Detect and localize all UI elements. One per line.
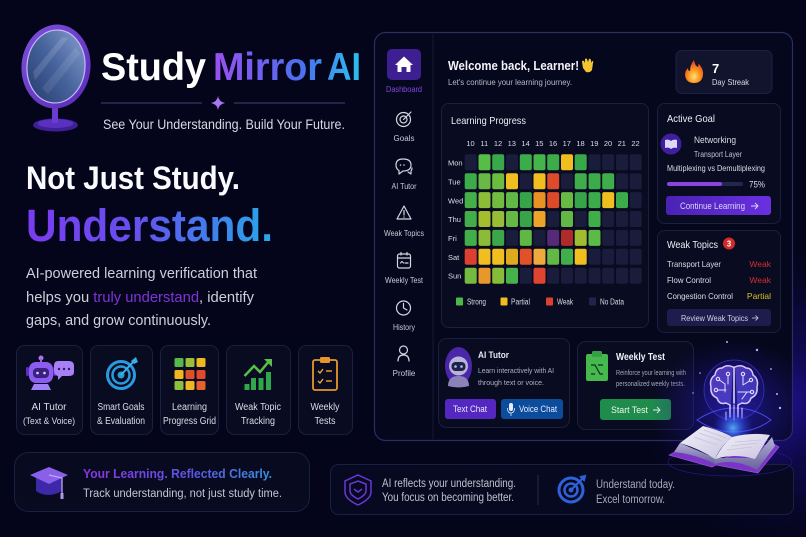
column labels: 12 <box>494 139 502 148</box>
feature: AI tutor <box>16 346 82 434</box>
banner: your learning: Your Learning. Reflected Clearly. <box>83 466 272 481</box>
button: text chat: Text Chat <box>453 404 487 414</box>
card: AI tutor <box>438 338 570 428</box>
column labels: 11 <box>480 139 488 148</box>
icon: open book <box>669 426 779 473</box>
feature: AI tutor: AI Tutor <box>31 402 67 413</box>
button: review weak topics: Review Weak Topics <box>681 314 748 323</box>
heatmap grid <box>465 154 642 284</box>
nav: goals <box>394 112 414 143</box>
panel: weak topics: Weak <box>749 259 772 269</box>
nav: goals: Goals <box>394 134 414 143</box>
icon: target <box>108 357 138 388</box>
panel: active goal <box>658 104 780 224</box>
card: day streak: 7 <box>712 61 719 76</box>
feature: learning progress grid <box>160 346 218 434</box>
title: Mirror <box>213 46 322 89</box>
panel: weak topics: Flow Control <box>667 275 711 285</box>
headline: Understand. <box>26 200 273 251</box>
feature: weak topic tracking <box>226 346 290 434</box>
legend: Weak <box>557 298 574 306</box>
feature: learning progress grid: Progress Grid <box>163 416 216 427</box>
banner: your learning <box>14 452 310 512</box>
column labels: 16 <box>549 139 557 148</box>
title: AI <box>327 46 361 89</box>
welcome heading: Welcome back, Learner! <box>448 58 579 73</box>
headline: Not Just Study. <box>26 160 240 196</box>
description: helps you truly understand, identify <box>26 289 254 306</box>
headline <box>26 160 273 251</box>
banner: reflection message: AI reflects your understanding. <box>382 478 516 490</box>
nav: dashboard <box>386 49 422 94</box>
column labels: 20 <box>604 139 612 148</box>
feature: weekly tests <box>298 346 352 434</box>
description: gaps, and grow continuously. <box>26 312 211 329</box>
nav: profile <box>393 346 416 378</box>
nav: weak topics: Weak Topics <box>384 229 424 238</box>
row labels: Fri <box>448 234 457 243</box>
panel: active goal: Networking <box>694 135 736 145</box>
title <box>101 46 361 89</box>
column labels: 14 <box>521 139 530 148</box>
logo: mirror <box>18 22 94 131</box>
feature: weekly tests: Weekly <box>310 402 340 413</box>
icon: flame <box>685 60 703 83</box>
panel: weak topics: Transport Layer <box>667 259 721 269</box>
nav: weak topics <box>384 206 424 238</box>
feature: weak topic tracking: Tracking <box>241 416 275 427</box>
icon: graduation cap <box>30 467 68 499</box>
icon: green clipboard <box>586 351 608 381</box>
welcome heading <box>448 58 593 87</box>
tagline: See Your Understanding. Build Your Future. <box>103 116 345 132</box>
legend: Partial <box>511 298 530 306</box>
row labels <box>448 158 463 280</box>
banner: reflection message: You focus on becoming better. <box>382 492 514 504</box>
card: weekly test: Weekly Test <box>616 352 666 363</box>
feature: AI tutor: (Text & Voice) <box>23 416 75 427</box>
feature: smart goals <box>90 346 152 434</box>
description <box>26 265 258 329</box>
button: start test: Start Test <box>611 405 648 415</box>
title: Study <box>101 46 206 89</box>
nav: history <box>393 301 415 332</box>
nav: AI tutor: AI Tutor <box>392 182 417 191</box>
icon: robot with chat bubble <box>26 356 74 390</box>
panel: learning progress: Learning Progress <box>451 115 526 127</box>
card: AI tutor: Learn interactively with AI <box>478 366 554 375</box>
welcome heading: Let's continue your learning journey. <box>448 77 572 87</box>
feature: smart goals: & Evaluation <box>97 416 145 427</box>
row labels: Thu <box>448 215 461 224</box>
card: day streak <box>676 50 772 94</box>
icon: brain <box>710 366 758 420</box>
card: AI tutor: AI Tutor <box>478 350 509 361</box>
card: weekly test: personalized weekly tests. <box>616 381 685 388</box>
legend: No Data <box>600 298 624 306</box>
nav: weekly test: Weekly Test <box>385 276 424 285</box>
panel: weak topics: Partial <box>747 291 771 301</box>
panel: dashboard <box>374 32 792 440</box>
icon: shield <box>345 475 371 505</box>
feature: learning progress grid: Learning <box>172 402 207 413</box>
panel: weak topics: Weak Topics <box>667 239 718 251</box>
feature: smart goals: Smart Goals <box>98 402 144 413</box>
nav: history: History <box>393 323 415 332</box>
column labels <box>466 139 640 148</box>
row labels: Wed <box>448 196 463 206</box>
panel: learning progress <box>442 104 648 328</box>
icon: robot avatar <box>445 347 472 388</box>
panel: weak topics: Congestion Control <box>667 291 733 301</box>
banner: reflection message: Excel tomorrow. <box>596 494 665 506</box>
legend: Strong <box>467 298 486 306</box>
card: weekly test: Reinforce your learning with <box>616 370 686 377</box>
panel: active goal: Active Goal <box>667 113 715 125</box>
sparkles <box>692 341 781 409</box>
banner: your learning: Track understanding, not just study time. <box>83 488 282 500</box>
icon: clipboard <box>313 357 337 390</box>
sidebar navigation <box>384 49 424 378</box>
card: day streak: Day Streak <box>712 77 750 87</box>
row labels: Sun <box>448 272 461 280</box>
nav: AI tutor <box>392 159 417 191</box>
card: AI tutor: through text or voice. <box>478 378 544 387</box>
description: AI-powered learning verification that <box>26 265 258 282</box>
icon: coloured grid <box>174 358 206 390</box>
column labels: 18 <box>576 139 585 148</box>
icon: blue target <box>559 476 585 502</box>
nav: dashboard: Dashboard <box>386 85 422 94</box>
panel: active goal: Multiplexing vs Demultiplexing <box>667 164 765 173</box>
card: weekly test <box>578 342 694 430</box>
button: voice chat: Voice Chat <box>519 404 557 414</box>
row labels: Tue <box>448 178 461 186</box>
panel: weak topics: Weak <box>749 275 772 285</box>
icon: book <box>660 134 682 154</box>
divider with star <box>101 96 345 110</box>
nav: profile: Profile <box>393 369 416 378</box>
button: continue learning: Continue Learning <box>680 201 745 211</box>
column labels: 21 <box>618 139 626 148</box>
illustration: glowing brain over open book <box>650 340 806 480</box>
progress bar: 75% <box>749 180 765 190</box>
feature: weak topic tracking: Weak Topic <box>235 402 281 413</box>
column labels: 13 <box>508 139 516 148</box>
column labels: 10 <box>466 139 475 148</box>
banner: reflection message <box>330 464 794 514</box>
icon: rising chart <box>244 359 272 390</box>
panel: active goal: Transport Layer <box>694 150 742 159</box>
feature: weekly tests: Tests <box>314 416 336 427</box>
legend <box>456 298 624 306</box>
column labels: 17 <box>563 139 571 148</box>
panel: weak topics <box>658 230 780 332</box>
row labels: Mon <box>448 158 463 168</box>
badge: 3 <box>727 240 732 248</box>
banner: reflection message: Understand today. <box>596 479 675 491</box>
icon: waving hand <box>582 58 593 72</box>
column labels: 15 <box>535 139 543 148</box>
column labels: 22 <box>631 139 640 148</box>
row labels: Sat <box>448 253 460 262</box>
column labels: 19 <box>590 139 598 148</box>
nav: weekly test <box>385 252 424 285</box>
